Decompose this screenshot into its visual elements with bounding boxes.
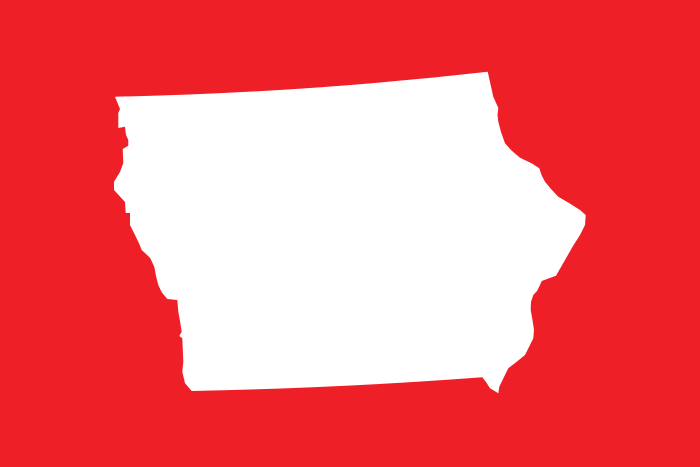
state silhouette: Iowa: [114, 72, 586, 393]
